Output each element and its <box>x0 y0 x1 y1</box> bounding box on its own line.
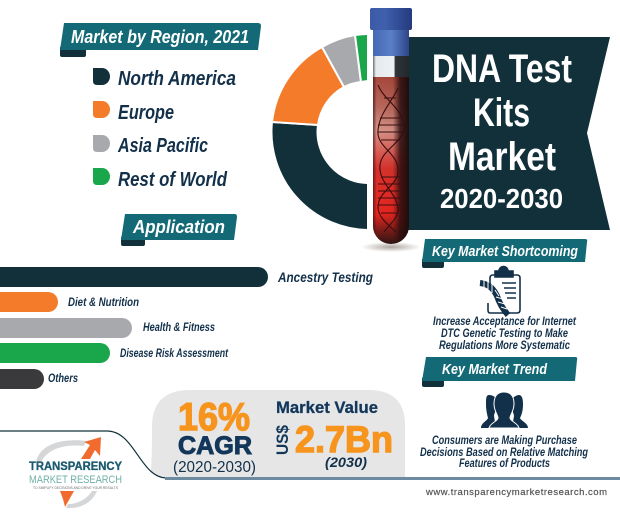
line 1: Increase Acceptance for Internet <box>433 314 577 328</box>
title line: Kits: Kits <box>473 91 530 135</box>
donut segment: Europe <box>272 47 344 125</box>
donut segment: Asia Pacific <box>322 35 361 87</box>
ribbon body <box>60 23 261 50</box>
ribbon body <box>422 357 577 381</box>
tube liquid <box>373 77 409 244</box>
donut segment: North America <box>271 122 370 230</box>
line 3: Regulations More Systematic <box>439 338 570 352</box>
marker <box>93 101 110 118</box>
logo upper swoosh <box>36 440 86 462</box>
curve line <box>0 431 167 478</box>
line 2: DTC Genetic Testing to Make <box>441 326 568 340</box>
title line: Market: Market <box>448 135 556 179</box>
line 1: Consumers are Making Purchase <box>432 433 577 447</box>
logo lower swoosh <box>66 491 97 508</box>
donut chart: market by region <box>271 34 372 230</box>
DNA helix <box>378 85 404 232</box>
shortcoming text <box>433 314 577 352</box>
legend <box>93 68 236 191</box>
CAGR label: CAGR <box>178 432 252 460</box>
clipboard clip <box>495 266 513 277</box>
label: Diet and Nutrition: Diet & Nutrition <box>68 297 139 309</box>
icon: clipboard with DNA <box>480 266 520 315</box>
logo <box>29 437 122 508</box>
market value year: (2030) <box>325 454 367 470</box>
title line: DNA Test: DNA Test <box>432 47 572 91</box>
heading ribbon: Application <box>121 214 237 246</box>
bottom rule <box>165 477 620 480</box>
legend item: Rest of World <box>93 168 228 191</box>
banner shape <box>408 37 610 230</box>
brand name second line: MARKET RESEARCH <box>29 474 122 486</box>
ribbon body <box>422 239 587 262</box>
logo upper arrow <box>81 437 101 459</box>
legend item: North America <box>93 68 236 90</box>
ribbon tab <box>422 258 444 268</box>
bar: Diet and Nutrition <box>0 292 58 312</box>
clipboard outline <box>488 275 520 313</box>
CAGR value: 16% <box>178 396 250 439</box>
logo lower arrow <box>60 491 74 507</box>
legend item: Asia Pacific <box>93 135 208 157</box>
liquid shading <box>373 77 409 244</box>
ribbon tab <box>121 236 145 246</box>
marker <box>93 168 110 185</box>
donut segment: Rest of World <box>354 35 367 81</box>
clipboard text lines <box>502 283 516 298</box>
brand name: TRANSPARENCY <box>29 461 122 473</box>
bar: Ancestry Testing <box>0 267 268 287</box>
brand tagline: TO SIMPLIFY DECISIONS AND DRIVE YOUR RESULTS <box>33 486 118 490</box>
tube neck <box>373 30 409 56</box>
heading text: Key Market Trend <box>442 361 548 378</box>
market value label: Market Value <box>276 398 378 417</box>
heading ribbon: Key Market Trend <box>422 357 577 387</box>
legend item: Europe <box>93 101 174 124</box>
logo divider curve <box>0 431 167 514</box>
panel background <box>150 390 405 478</box>
heading text: Market by Region, 2021 <box>71 27 249 47</box>
center person <box>489 392 519 428</box>
heading ribbon: Key Market Shortcoming <box>422 239 587 268</box>
title years: 2020-2030 <box>440 183 563 214</box>
ribbon tab <box>60 46 86 57</box>
marker <box>93 135 110 152</box>
CAGR period: (2020-2030) <box>173 459 256 476</box>
line 3: Features of Products <box>459 456 550 470</box>
heading text: Key Market Shortcoming <box>432 244 578 260</box>
DNA rungs <box>484 280 507 309</box>
heading text: Application <box>132 217 225 237</box>
icon: group of people <box>481 392 528 428</box>
ribbon tab <box>422 377 444 387</box>
website url: www.transparencymarketresearch.com <box>425 487 607 498</box>
DNA strand <box>480 283 508 315</box>
label: Asia Pacific <box>117 135 208 157</box>
bar: Disease Risk Assessment <box>0 343 110 363</box>
marker <box>93 68 110 85</box>
bar chart: application <box>0 267 373 389</box>
tube cap <box>370 8 412 30</box>
label: Europe <box>118 102 174 124</box>
tube shadow <box>361 242 421 252</box>
ribbon body <box>121 214 237 240</box>
right person <box>511 395 528 428</box>
label: Disease Risk Assessment: Disease Risk Assessment <box>120 348 229 360</box>
bar: Health and Fitness <box>0 318 132 338</box>
heading ribbon: Market by Region <box>60 23 261 57</box>
label: Ancestry Testing: Ancestry Testing <box>277 269 373 285</box>
bar: Others <box>0 369 44 389</box>
currency label: US$ <box>273 425 292 455</box>
title banner <box>408 37 610 230</box>
test tube with DNA <box>361 8 421 252</box>
stats panel <box>0 390 620 514</box>
tube glass <box>373 55 409 79</box>
market value number: 2.7Bn <box>295 419 393 460</box>
label: Others: Others <box>48 373 78 385</box>
left person <box>481 395 497 428</box>
trend text <box>420 433 589 470</box>
label: Rest of World <box>118 169 228 191</box>
label: Health and Fitness: Health & Fitness <box>143 322 215 334</box>
label: North America <box>118 68 236 90</box>
